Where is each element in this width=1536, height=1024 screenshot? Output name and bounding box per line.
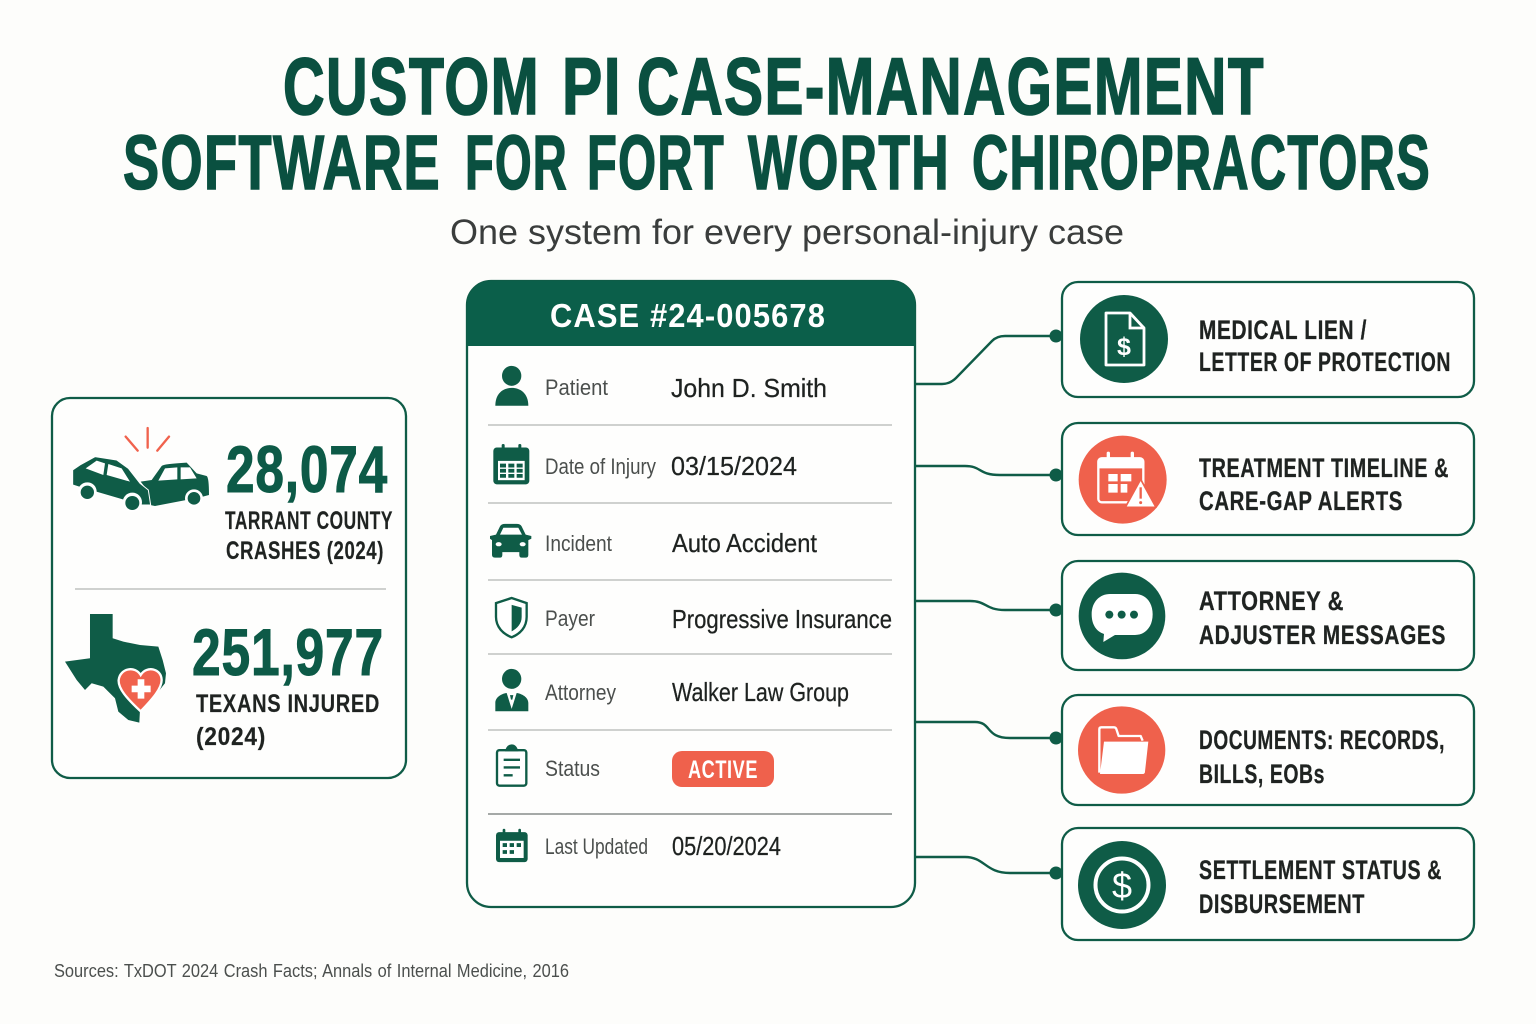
row: attorney bbox=[495, 669, 849, 711]
row: incident: Auto Accident bbox=[672, 528, 818, 558]
label bbox=[1199, 725, 1445, 789]
stat: crashes number: 28,074 bbox=[226, 432, 388, 506]
title bbox=[123, 42, 1431, 206]
row: last updated: Last Updated bbox=[545, 834, 648, 859]
stat: crashes label bbox=[225, 507, 393, 565]
row: payer bbox=[496, 598, 892, 637]
card: documents bbox=[1062, 695, 1474, 805]
label: ATTORNEY & bbox=[1199, 586, 1344, 616]
label: MEDICAL LIEN / bbox=[1199, 315, 1367, 345]
icon: lien document bbox=[1080, 295, 1168, 383]
row: incident bbox=[490, 524, 818, 558]
icon: calendar small bbox=[496, 829, 528, 862]
row: last updated: 05/20/2024 bbox=[672, 831, 781, 861]
label: ADJUSTER MESSAGES bbox=[1199, 620, 1446, 650]
connectors bbox=[915, 330, 1062, 880]
panel: case record bbox=[467, 281, 915, 907]
icon: folder bbox=[1078, 706, 1165, 794]
label: SETTLEMENT STATUS & bbox=[1199, 855, 1442, 885]
stat: injured label: (2024) bbox=[196, 723, 266, 751]
row: status bbox=[497, 744, 774, 787]
icon: dollar coin bbox=[1078, 841, 1166, 929]
row: attorney: Walker Law Group bbox=[672, 677, 849, 707]
title: WORTH bbox=[748, 120, 950, 206]
subtitle: One system for every personal-injury case bbox=[450, 213, 1124, 252]
label: CARE-GAP ALERTS bbox=[1199, 486, 1403, 516]
row: status: Status bbox=[545, 756, 600, 781]
label: BILLS, EOBs bbox=[1199, 759, 1325, 789]
icon: Texas with heart bbox=[65, 614, 166, 723]
row: payer: Payer bbox=[545, 606, 595, 631]
icon: shield bbox=[496, 598, 527, 637]
icon: calendar alert bbox=[1079, 436, 1167, 524]
title: CUSTOM bbox=[283, 42, 540, 132]
row: date of injury: 03/15/2024 bbox=[671, 451, 797, 481]
row: last updated bbox=[496, 829, 781, 862]
icon: car crash bbox=[73, 428, 209, 512]
stat: injured label bbox=[196, 690, 380, 751]
sources: Sources: TxDOT 2024 Crash Facts; Annals of Internal Medicine, 2016 bbox=[54, 961, 569, 981]
stat: injured number: 251,977 bbox=[192, 615, 384, 689]
status badge: ACTIVE bbox=[688, 756, 758, 784]
icon: person bbox=[495, 366, 528, 406]
title: FOR bbox=[465, 120, 568, 206]
stat: crashes label: TARRANT COUNTY bbox=[225, 507, 393, 535]
label bbox=[1199, 315, 1451, 377]
card: treatment timeline bbox=[1062, 423, 1474, 535]
label bbox=[1199, 453, 1449, 516]
icon: car bbox=[490, 524, 531, 558]
card: messages bbox=[1062, 561, 1474, 670]
title: SOFTWARE bbox=[123, 120, 441, 206]
card: medical lien bbox=[1062, 282, 1474, 397]
row: patient bbox=[495, 366, 827, 406]
icon: dollar coin: $ bbox=[1112, 865, 1132, 906]
row: attorney: Attorney bbox=[545, 680, 616, 705]
title: FORT bbox=[587, 120, 725, 206]
case header bbox=[467, 281, 915, 346]
row: incident: Incident bbox=[545, 531, 612, 556]
icon: speech bubble bbox=[1079, 573, 1165, 659]
row: date of injury: Date of Injury bbox=[545, 454, 656, 479]
title: CASE-MANAGEMENT bbox=[637, 42, 1265, 132]
icon: lien document: $ bbox=[1117, 333, 1131, 361]
icon: clipboard bbox=[497, 744, 526, 786]
row: patient: John D. Smith bbox=[671, 373, 827, 403]
icon: attorney bbox=[495, 669, 528, 711]
stat: injured label: TEXANS INJURED bbox=[196, 690, 380, 718]
row: patient: Patient bbox=[545, 375, 608, 400]
case header: CASE #24-005678 bbox=[550, 297, 826, 334]
icon: calendar bbox=[493, 444, 529, 484]
label bbox=[1199, 586, 1446, 650]
label bbox=[1199, 855, 1442, 919]
stat: crashes label: CRASHES (2024) bbox=[226, 537, 384, 565]
status badge bbox=[672, 751, 774, 787]
row: date of injury bbox=[493, 444, 797, 484]
card: settlement bbox=[1062, 828, 1474, 940]
label: TREATMENT TIMELINE & bbox=[1199, 453, 1449, 483]
panel: statistics bbox=[52, 398, 406, 778]
label: DISBURSEMENT bbox=[1199, 889, 1365, 919]
title: PI bbox=[562, 42, 622, 132]
row: payer: Progressive Insurance bbox=[672, 604, 892, 634]
